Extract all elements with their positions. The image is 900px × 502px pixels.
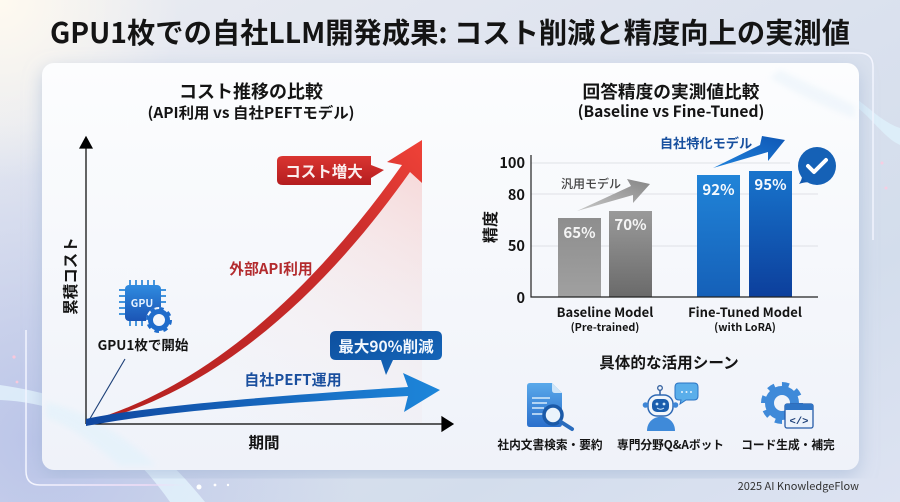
label: cost increase: コスト増大	[285, 160, 363, 182]
red arrow: external API	[86, 140, 422, 424]
icon: GPU chip with gear: GPU	[131, 296, 153, 311]
arrow: specialised model	[660, 133, 785, 168]
footer credit: 2025 AI KnowledgeFlow	[738, 478, 859, 494]
use case label: document search: 社内文書検索・要約	[497, 436, 603, 453]
bar: fine-tuned 95%	[749, 171, 792, 297]
icon: robot chat bot	[643, 383, 698, 431]
category label: baseline model: Baseline Model	[557, 302, 653, 321]
callout: up to 90 percent reduction: 最大90%削減	[338, 335, 434, 357]
x axis	[86, 417, 453, 431]
bar: baseline 70%	[609, 211, 652, 297]
callout: up to 90 percent reduction	[330, 331, 442, 375]
area under red curve	[88, 172, 422, 423]
y axis ticks: 100	[499, 152, 525, 173]
bar: baseline 65%	[558, 218, 601, 297]
thin pointer line	[88, 359, 125, 422]
use cases heading: 具体的な活用シーン	[599, 351, 739, 373]
y axis	[80, 137, 92, 424]
main card panel	[42, 63, 859, 470]
use case label: Q&A bot: 専門分野Q&Aボット	[617, 436, 724, 453]
accuracy chart heading: (Baseline vs Fine-Tuned)	[578, 100, 764, 122]
category label: baseline model	[557, 302, 653, 335]
icon: GPU chip with gear	[119, 280, 172, 333]
category label: baseline model: (Pre-trained)	[571, 319, 639, 335]
arrow: specialised model: 自社特化モデル	[660, 133, 752, 152]
category label: fine-tuned model: Fine-Tuned Model	[688, 302, 802, 321]
card light streaks	[46, 70, 855, 466]
icon: gear with code window	[764, 384, 813, 428]
use case label: code generation: コード生成・補完	[741, 436, 835, 453]
arrow: generic model	[561, 175, 650, 211]
label: start with one GPU: GPU1枚で開始	[98, 334, 189, 354]
blue arrow: in-house PEFT	[86, 373, 440, 426]
title: GPU1枚での自社LLM開発成果: コスト削減と精度向上の実測値	[50, 11, 850, 52]
icon: document search	[527, 383, 572, 429]
y axis ticks	[499, 152, 525, 308]
category label: fine-tuned model: (with LoRA)	[714, 319, 776, 335]
cost chart heading: (API利用 vs 自社PEFTモデル)	[148, 102, 354, 123]
grid lines	[531, 163, 818, 246]
y axis ticks: 0	[516, 287, 525, 308]
panel: use cases	[497, 351, 835, 453]
category label: fine-tuned model	[688, 302, 802, 335]
bar: fine-tuned 95%: 95%	[754, 174, 787, 195]
cost chart heading	[148, 78, 354, 123]
y axis ticks: 80	[508, 184, 525, 205]
chart axes	[531, 155, 818, 297]
icon: gear with code window: </>	[790, 416, 808, 428]
panel: cost comparison chart	[59, 78, 453, 453]
icon: check badge	[798, 147, 836, 185]
y axis label: 累積コスト	[59, 237, 81, 315]
cost chart heading: コスト推移の比較	[179, 78, 323, 104]
arrow: generic model: 汎用モデル	[561, 175, 621, 192]
bar: fine-tuned 92%	[697, 175, 740, 297]
accuracy chart heading: 回答精度の実測値比較	[583, 78, 760, 104]
accuracy chart heading	[578, 78, 764, 122]
bar: baseline 65%: 65%	[563, 222, 596, 243]
bar: fine-tuned 92%: 92%	[702, 179, 735, 200]
label: cost increase	[277, 156, 384, 185]
y axis title: 精度	[477, 211, 501, 243]
y axis ticks: 50	[508, 235, 525, 256]
x axis label: 期間	[248, 431, 280, 453]
label: external API: 外部API利用	[229, 258, 313, 279]
panel: accuracy comparison chart	[477, 78, 836, 335]
bar: baseline 70%: 70%	[614, 214, 647, 235]
label: in-house PEFT: 自社PEFT運用	[244, 369, 342, 390]
